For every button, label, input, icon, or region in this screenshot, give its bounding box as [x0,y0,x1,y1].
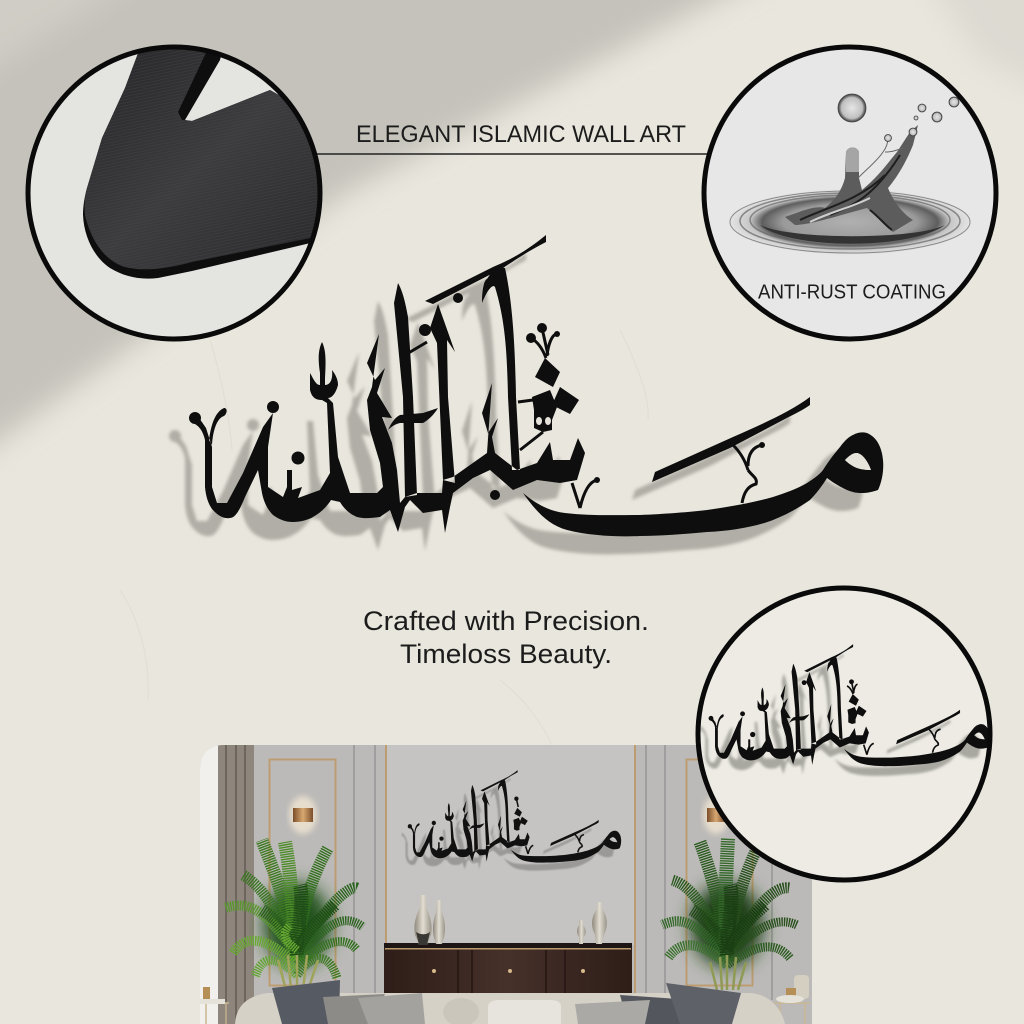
detail circle: water splash anti-rust coating [704,47,996,339]
water pool ripples [728,189,972,255]
detail circle: brushed metal edge [28,40,340,339]
ornament dots [189,293,765,500]
sideboard [384,943,632,993]
room scene photo [199,745,812,1024]
vases [414,895,607,945]
room calligraphy shadow [401,778,614,871]
tagline: Timeloss Beauty. [400,639,612,669]
water droplets [838,94,960,142]
black metal plate [83,50,318,279]
tagline: Crafted with Precision. [363,606,649,636]
close-up calligraphy [709,644,990,766]
window and curtain [200,745,254,1024]
meem counter and ornament holes [536,417,871,470]
table decor [199,975,809,1004]
calligraphy shadow [169,253,863,554]
right plant [662,838,797,967]
close-up calligraphy shadow [700,654,980,776]
water crown splash [785,125,918,232]
letter strokes [191,235,810,533]
throw pillows [272,980,741,1024]
sofa [235,993,785,1024]
centre wall panel [386,745,635,945]
left plant stems [278,955,318,990]
side tables [200,1003,810,1024]
wall below right of room [812,880,1024,1024]
wall sconces [289,796,729,834]
coating label: ANTI-RUST COATING [758,282,946,304]
right plant stems [710,955,746,990]
tagline [363,606,649,669]
left plant [225,840,363,978]
title heading: ELEGANT ISLAMIC WALL ART [356,121,686,148]
gold wall trim and mouldings [270,745,772,1000]
room calligraphy [408,770,621,863]
calligraphy wall art [189,235,883,536]
meem and sweeping tail [523,432,883,536]
detail circle: calligraphy close-up [698,588,990,880]
thin flourishes [400,328,762,508]
